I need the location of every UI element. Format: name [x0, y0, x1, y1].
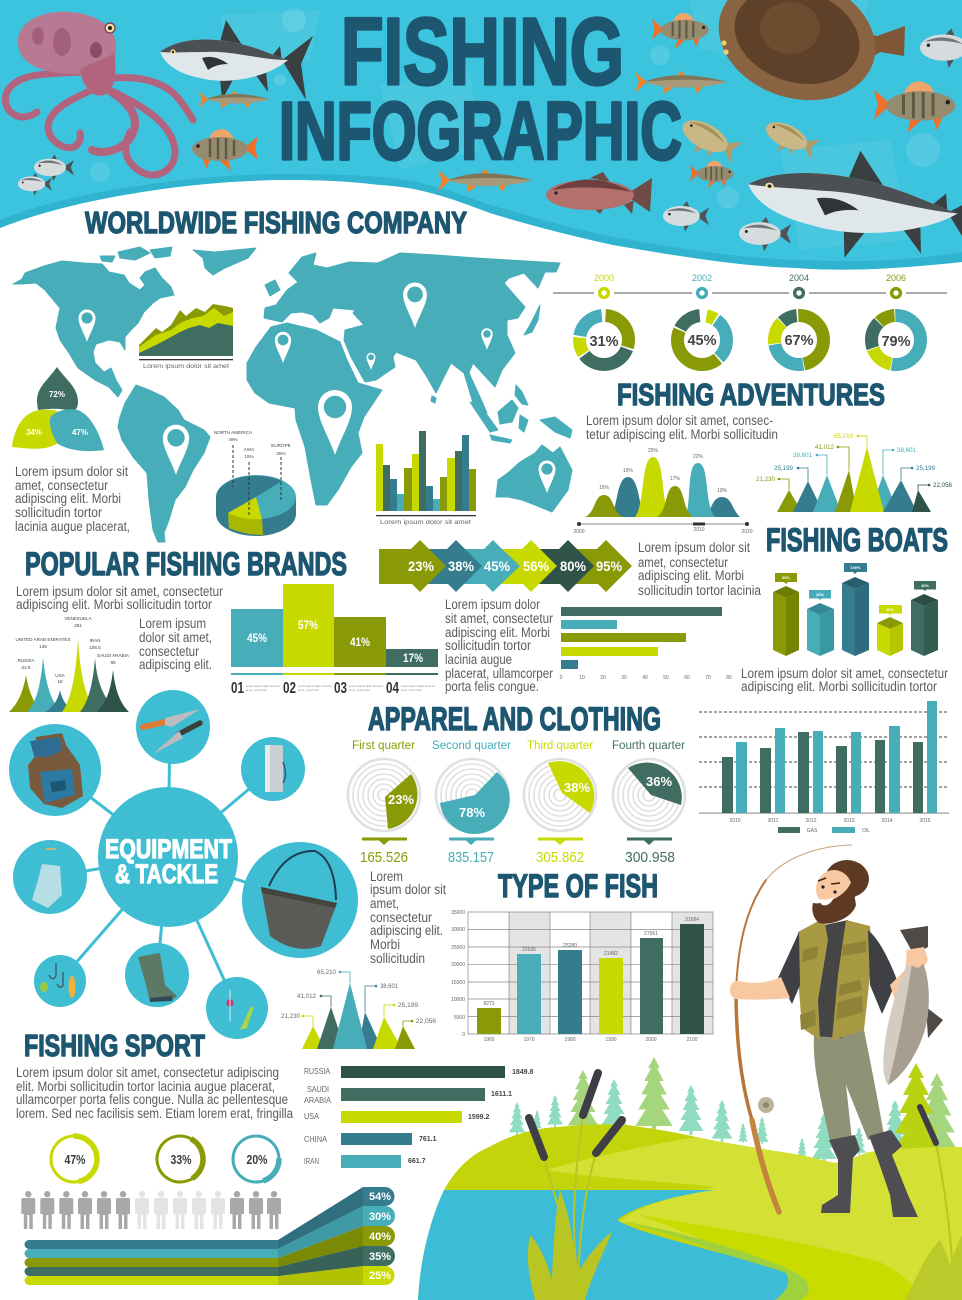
- people pictogram: [21, 1191, 281, 1229]
- text block: map left: lacinia augue placerat,: [15, 519, 130, 534]
- small triangle chart with leaders: 41,012: [297, 993, 316, 1000]
- radial gauges: [348, 759, 685, 834]
- step bar chart: 04: [386, 680, 399, 697]
- column chart: type of fish: 30000: [451, 927, 465, 933]
- bell curve chart: 2000: [573, 529, 585, 535]
- hub title: [105, 834, 232, 889]
- text block: arrow chain: amet, consectetur: [638, 555, 728, 570]
- timeline: [553, 273, 947, 297]
- title: INFOGRAPHIC: [279, 86, 682, 177]
- bell curve chart: 17%: [670, 476, 681, 482]
- panel: equipment and tackle network: [9, 690, 358, 1039]
- 3D columns chart: 20%: [886, 607, 894, 612]
- ribbon chart: 54%: [369, 1191, 391, 1203]
- donut 45%: 45%: [687, 333, 717, 349]
- step bar chart: 02: [283, 680, 296, 697]
- icon: landing net: [13, 840, 87, 914]
- petals chart: [12, 367, 104, 451]
- 3D pie chart: NORTH AMERICA: [214, 430, 253, 435]
- timeline: 2006: [886, 273, 906, 283]
- horizontal bar chart: 40: [642, 675, 648, 681]
- arrow chain percentages: 45%: [484, 558, 511, 574]
- country peaks chart: UNITED ARAB EMIRATES: [15, 637, 71, 642]
- text block: sport: [16, 1065, 293, 1121]
- bell curve chart: 2020: [741, 529, 753, 535]
- 3D pie chart: 15%: [244, 454, 254, 459]
- text block: adventures: Lorem ipsum dolor sit amet, consec-: [586, 413, 773, 428]
- gas and oil bar chart: 2012: [805, 818, 817, 824]
- 3D columns chart: 100%: [850, 565, 861, 570]
- fish school: [18, 0, 962, 271]
- bar chart on map: [376, 431, 476, 526]
- water background with wave: [0, 0, 962, 270]
- text block: sport: elit. Morbi sollicitudin tortor lacinia augue placerat,: [16, 1079, 275, 1094]
- boots: [821, 1130, 918, 1217]
- triangle peaks chart with leaders: 25,199: [916, 465, 935, 472]
- column chart: type of fish: 1990: [605, 1037, 617, 1043]
- column chart: type of fish: 10000: [451, 997, 465, 1003]
- step bar chart: amet, cons tortor: [349, 688, 370, 692]
- text block: equipment: [370, 869, 446, 966]
- map pins: [78, 282, 556, 493]
- radial gauges: 36%: [646, 774, 672, 789]
- step bar chart: Lorem ipsum dolor sit amet: [349, 684, 383, 688]
- text block: equipment: Lorem: [370, 869, 403, 884]
- petals chart: 47%: [72, 428, 88, 437]
- column chart: type of fish: 21482: [604, 951, 618, 957]
- text block: brands narrow: adipiscing elit.: [139, 657, 212, 672]
- column chart: type of fish: 1980: [564, 1037, 576, 1043]
- icon: hooks and lures: [34, 955, 86, 1007]
- country peaks chart: SAUDI ARABIA: [97, 653, 130, 658]
- column chart: type of fish: 27561: [644, 931, 658, 937]
- step bar chart: 17%: [403, 651, 423, 665]
- country peaks chart: [9, 616, 130, 712]
- heading: popular fishing brands: POPULAR FISHING BRANDS: [25, 546, 347, 582]
- petals chart: 72%: [49, 390, 65, 399]
- text block: arrow chain: Lorem ipsum dolor sit: [638, 540, 750, 555]
- head and beard: [812, 860, 869, 924]
- horizontal bar chart: 50: [663, 675, 669, 681]
- gas and oil bar chart: 2013: [843, 818, 855, 824]
- ring gauges: 47%: [64, 1152, 86, 1167]
- ribbon chart: 30%: [369, 1211, 391, 1223]
- text block: brands narrow: [139, 616, 212, 672]
- radial gauges: 38%: [564, 780, 590, 795]
- text block: middle: lacinia augue: [445, 652, 512, 667]
- text block: middle: sit amet, consectetur: [445, 611, 553, 626]
- horizontal bar chart: 0: [560, 675, 563, 681]
- heading: fishing sport: FISHING SPORT: [24, 1028, 205, 1063]
- country bars: 661.7: [408, 1158, 426, 1165]
- arrow chain percentages: 95%: [596, 558, 623, 574]
- column chart: type of fish: 22535: [522, 947, 536, 953]
- 3D pie chart: 49%: [228, 437, 238, 442]
- text block: boats: adipiscing elit. Morbi sollicitudin tortor: [741, 679, 937, 694]
- donut 79%: 79%: [881, 334, 911, 350]
- column chart: type of fish: 2100: [686, 1037, 698, 1043]
- 3D pie chart: EUROPE: [271, 443, 291, 448]
- text block: middle: adipiscing elit. Morbi: [445, 625, 550, 640]
- icon: rubber boots: [125, 943, 189, 1007]
- text block: boats: [741, 666, 948, 694]
- text block: middle: sollicitudin tortor: [445, 638, 531, 653]
- area chart on map: Lorem ipsum dolor sit amet: [143, 363, 229, 370]
- arrow chain percentages: 56%: [523, 558, 550, 574]
- text block: equipment: Morbi: [370, 937, 400, 952]
- column chart: type of fish: 5000: [454, 1015, 465, 1021]
- step bar chart: 41%: [350, 635, 370, 649]
- gas and oil bar chart: 2010: [729, 818, 741, 824]
- text block: sport: Lorem ipsum dolor sit amet, consectetur adipiscing: [16, 1065, 279, 1080]
- triangle peaks chart with leaders: 38,601: [897, 447, 916, 454]
- text block: middle: Lorem ipsum dolor: [445, 597, 540, 612]
- triangle peaks chart with leaders: 25,199: [774, 465, 793, 472]
- text block: map left: adipiscing elit. Morbi: [15, 491, 121, 506]
- gas and oil bar chart: 2014: [881, 818, 893, 824]
- column chart: type of fish: 35000: [451, 910, 465, 916]
- step bar chart: amet, cons tortor: [298, 688, 319, 692]
- country bars: [304, 1066, 534, 1168]
- text block: sport: ullamcorper porta felis congue. Nulla ac pellentesque: [16, 1092, 288, 1107]
- horizontal bar chart: 80: [726, 675, 732, 681]
- icon: thermos: [241, 737, 305, 801]
- text block: equipment: consectetur: [370, 910, 432, 925]
- arrow chain percentages: 23%: [408, 558, 435, 574]
- triangle peaks chart with leaders: [756, 433, 952, 512]
- column chart: type of fish: 8273: [483, 1001, 495, 1007]
- quarter labels: [352, 740, 685, 752]
- column chart: type of fish: 25000: [451, 945, 465, 951]
- text block: brands narrow: consectetur: [139, 644, 199, 659]
- hub title: EQUIPMENT: [105, 834, 232, 864]
- 3D pie chart: ASIA: [244, 447, 255, 452]
- hub circle: [98, 787, 238, 927]
- icon: cooking pot: [242, 842, 358, 958]
- title: [279, 0, 682, 177]
- 3D columns chart: 60%: [782, 575, 790, 580]
- text block: arrow chain: [638, 540, 761, 598]
- world map: [13, 247, 572, 542]
- country peaks chart: USA: [55, 673, 66, 678]
- torso: shirt and vest: [797, 918, 872, 1040]
- bell curve chart: 10%: [717, 488, 728, 494]
- text block: brands: Lorem ipsum dolor sit amet, consectetur: [16, 584, 223, 599]
- column chart: type of fish: 1960: [483, 1037, 495, 1043]
- gauge values: 835.157: [448, 849, 494, 866]
- step bar chart: 01: [231, 680, 244, 697]
- octopus: [5, 12, 193, 175]
- arrow chain percentages: 38%: [448, 558, 475, 574]
- step bar chart: 57%: [298, 618, 318, 632]
- right arm holding fish: [868, 930, 928, 1014]
- text block: equipment: amet,: [370, 896, 399, 911]
- radial gauges: 23%: [388, 792, 414, 807]
- text block: map left: amet, consectetur: [15, 478, 108, 493]
- arrow chain percentages: [379, 540, 632, 592]
- quarter labels: Second quarter: [432, 740, 511, 752]
- donut 45%: [678, 316, 726, 364]
- text block: map left: Lorem ipsum dolor sit: [15, 464, 128, 479]
- country peaks chart: 88: [110, 660, 116, 665]
- hub title: & TACKLE: [115, 859, 218, 889]
- ribbon chart: 35%: [369, 1251, 391, 1263]
- gas and oil bar chart: OIL: [862, 828, 870, 834]
- column chart: type of fish: 15000: [451, 980, 465, 986]
- column chart: type of fish: 25280: [563, 943, 577, 949]
- arrow chain percentages: 80%: [560, 558, 587, 574]
- radial gauges: 78%: [459, 805, 485, 820]
- 3D pie chart: 35%: [276, 451, 286, 456]
- text block: equipment: adipiscing elit.: [370, 923, 443, 938]
- legs: [814, 1030, 884, 1142]
- small triangle chart with leaders: 21,230: [281, 1013, 300, 1020]
- heading: apparel and clothing: APPAREL AND CLOTHING: [368, 701, 661, 737]
- step bar chart: [231, 584, 438, 697]
- horizontal bar chart: 70: [705, 675, 711, 681]
- hill and lake: [418, 1124, 962, 1300]
- step bar chart: 03: [334, 680, 347, 697]
- text block: map left: [15, 464, 130, 534]
- icon: backpack: [9, 724, 101, 816]
- country bars: 1599.2: [468, 1114, 490, 1121]
- small triangle chart with leaders: [281, 969, 436, 1049]
- country peaks chart: VENEZUELA: [64, 616, 93, 621]
- triangle peaks chart with leaders: 38,601: [793, 452, 812, 459]
- reeds and grass: [528, 1073, 962, 1300]
- bell curve chart: 15%: [599, 485, 610, 491]
- country peaks chart: RUSSIA: [17, 658, 35, 663]
- small triangle chart with leaders: 38,601: [380, 983, 398, 990]
- horizontal bar chart: 10: [579, 675, 585, 681]
- step bar chart: Lorem ipsum dolor sit amet: [246, 684, 280, 688]
- icon: fishing floats: [206, 977, 268, 1039]
- triangle peaks chart with leaders: 22,056: [933, 482, 952, 489]
- column chart: type of fish: [451, 910, 713, 1043]
- country peaks chart: 106.5: [89, 645, 101, 650]
- heading: fishing adventures: FISHING ADVENTURES: [617, 377, 885, 412]
- country peaks chart: 18: [57, 679, 63, 684]
- column chart: type of fish: 2000: [645, 1037, 657, 1043]
- step bar chart: 45%: [247, 631, 267, 645]
- country peaks chart: IRAN: [90, 638, 100, 643]
- timeline: 2002: [692, 273, 712, 283]
- text block: adventures: tetur adipiscing elit. Morbi sollicitudin: [586, 427, 778, 442]
- country bars: RUSSIA: [304, 1066, 330, 1076]
- country bars: SAUDI: [307, 1084, 329, 1094]
- horizontal bar chart: [560, 607, 732, 681]
- ring gauges: 33%: [170, 1152, 192, 1167]
- text block: brands narrow: dolor sit amet,: [139, 630, 212, 645]
- donut 31%: 31%: [589, 334, 619, 350]
- quarter labels: First quarter: [352, 740, 415, 752]
- text block: brands narrow: Lorem ipsum: [139, 616, 206, 631]
- country bars: 761.1: [419, 1136, 437, 1143]
- heading: type of fish: TYPE OF FISH: [498, 868, 658, 904]
- bell curve chart: [573, 448, 753, 535]
- text block: arrow chain: adipiscing elit. Morbi: [638, 568, 744, 583]
- country bars: USA: [304, 1111, 319, 1121]
- gas and oil bar chart: 2011: [768, 818, 779, 824]
- column chart: type of fish: 0: [462, 1032, 465, 1038]
- area chart on map: [139, 304, 233, 370]
- country peaks chart: 139: [39, 644, 47, 649]
- quarter labels: Third quarter: [527, 740, 593, 752]
- gauge values: 165.526: [360, 849, 408, 866]
- text block: adventures: [586, 413, 778, 442]
- text block: equipment: sollicitudin: [370, 951, 425, 966]
- text block: brands: [16, 584, 223, 612]
- bell curve chart: 19%: [623, 468, 634, 474]
- text block: brands: adipiscing elit. Morbi sollicitudin tortor: [16, 597, 212, 612]
- gas and oil bar chart: [699, 701, 949, 834]
- triangle peaks chart with leaders: 65,210: [834, 433, 853, 440]
- country bars: IRAN: [304, 1156, 319, 1166]
- 3D columns chart: 40%: [921, 583, 929, 588]
- text block: middle: placerat, ullamcorper: [445, 666, 553, 681]
- step bar chart: Lorem ipsum dolor sit amet: [298, 684, 332, 688]
- text block: equipment: ipsum dolor sit: [370, 882, 446, 897]
- text block: arrow chain: sollicitudin tortor lacinia: [638, 583, 761, 598]
- triangle peaks chart with leaders: 41,012: [815, 444, 834, 451]
- text block: middle: porta felis congue.: [445, 679, 539, 694]
- ribbon chart: 40%: [369, 1231, 391, 1243]
- fisherman: [730, 845, 943, 1217]
- bar chart on map: Lorem ipsum dolor sit amet: [380, 519, 471, 526]
- country bars: 1611.1: [491, 1091, 512, 1098]
- bell curve chart: 25%: [648, 448, 659, 454]
- bell curve chart: 22%: [693, 454, 704, 460]
- country bars: ARABIA: [304, 1095, 331, 1105]
- column chart: type of fish: 1970: [523, 1037, 535, 1043]
- donut 79%: [872, 316, 920, 364]
- donut 67%: 67%: [784, 333, 814, 349]
- horizontal bar chart: 30: [621, 675, 627, 681]
- gauge values: 300.958: [625, 849, 675, 866]
- text block: map left: sollicitudin tortor: [15, 505, 102, 520]
- trees: [509, 1057, 958, 1163]
- triangle peaks chart with leaders: 21,230: [756, 476, 775, 483]
- donut 31%: [580, 316, 628, 364]
- 3D pie chart: [214, 430, 296, 536]
- country bars: 1849.8: [512, 1069, 534, 1076]
- ribbon chart: [24, 1187, 395, 1285]
- small triangle chart with leaders: 22,056: [416, 1018, 436, 1025]
- small triangle chart with leaders: 65,210: [317, 969, 336, 976]
- caught fish: [883, 926, 943, 1085]
- step bar chart: amet, cons tortor: [246, 688, 267, 692]
- text block: middle: [445, 597, 553, 694]
- gas and oil bar chart: 2015: [919, 818, 931, 824]
- country peaks chart: 281: [74, 623, 82, 628]
- icon: knives: [136, 690, 210, 764]
- column chart: type of fish: 20000: [451, 962, 465, 968]
- petals chart: 34%: [26, 428, 42, 437]
- timeline: 2004: [789, 273, 809, 283]
- gauge values: 305.862: [536, 849, 584, 866]
- title: FISHING: [341, 0, 624, 105]
- quarter labels: Fourth quarter: [612, 740, 685, 752]
- country bars: CHINA: [304, 1134, 327, 1144]
- heading: worldwide fishing company: WORLDWIDE FISHING COMPANY: [85, 205, 467, 240]
- bell curve chart: 2010: [693, 527, 705, 533]
- 3D columns chart: [773, 563, 938, 656]
- step bar chart: Lorem ipsum dolor sit amet: [401, 684, 435, 688]
- ring gauges: 20%: [246, 1152, 268, 1167]
- gauge values: [360, 838, 675, 866]
- horizontal bar chart: 60: [684, 675, 690, 681]
- small triangle chart with leaders: 25,199: [398, 1002, 418, 1009]
- gas and oil bar chart: GAS: [807, 828, 818, 834]
- ribbon chart: 25%: [369, 1270, 391, 1282]
- fishing rod: [736, 845, 852, 1212]
- text block: sport: lorem. Sed nec facilisis sem. Etiam lorem erat, fringilla: [16, 1106, 293, 1121]
- 3D columns chart: 40%: [816, 592, 824, 597]
- country peaks chart: 22.5: [22, 665, 31, 670]
- horizontal bar chart: 20: [600, 675, 606, 681]
- column chart: type of fish: 31684: [685, 917, 699, 923]
- donut 67%: [774, 316, 824, 364]
- ring gauges: [51, 1128, 279, 1190]
- timeline: 2000: [594, 273, 614, 283]
- left arm holding rod: [730, 932, 800, 1004]
- step bar chart: amet, cons tortor: [401, 688, 422, 692]
